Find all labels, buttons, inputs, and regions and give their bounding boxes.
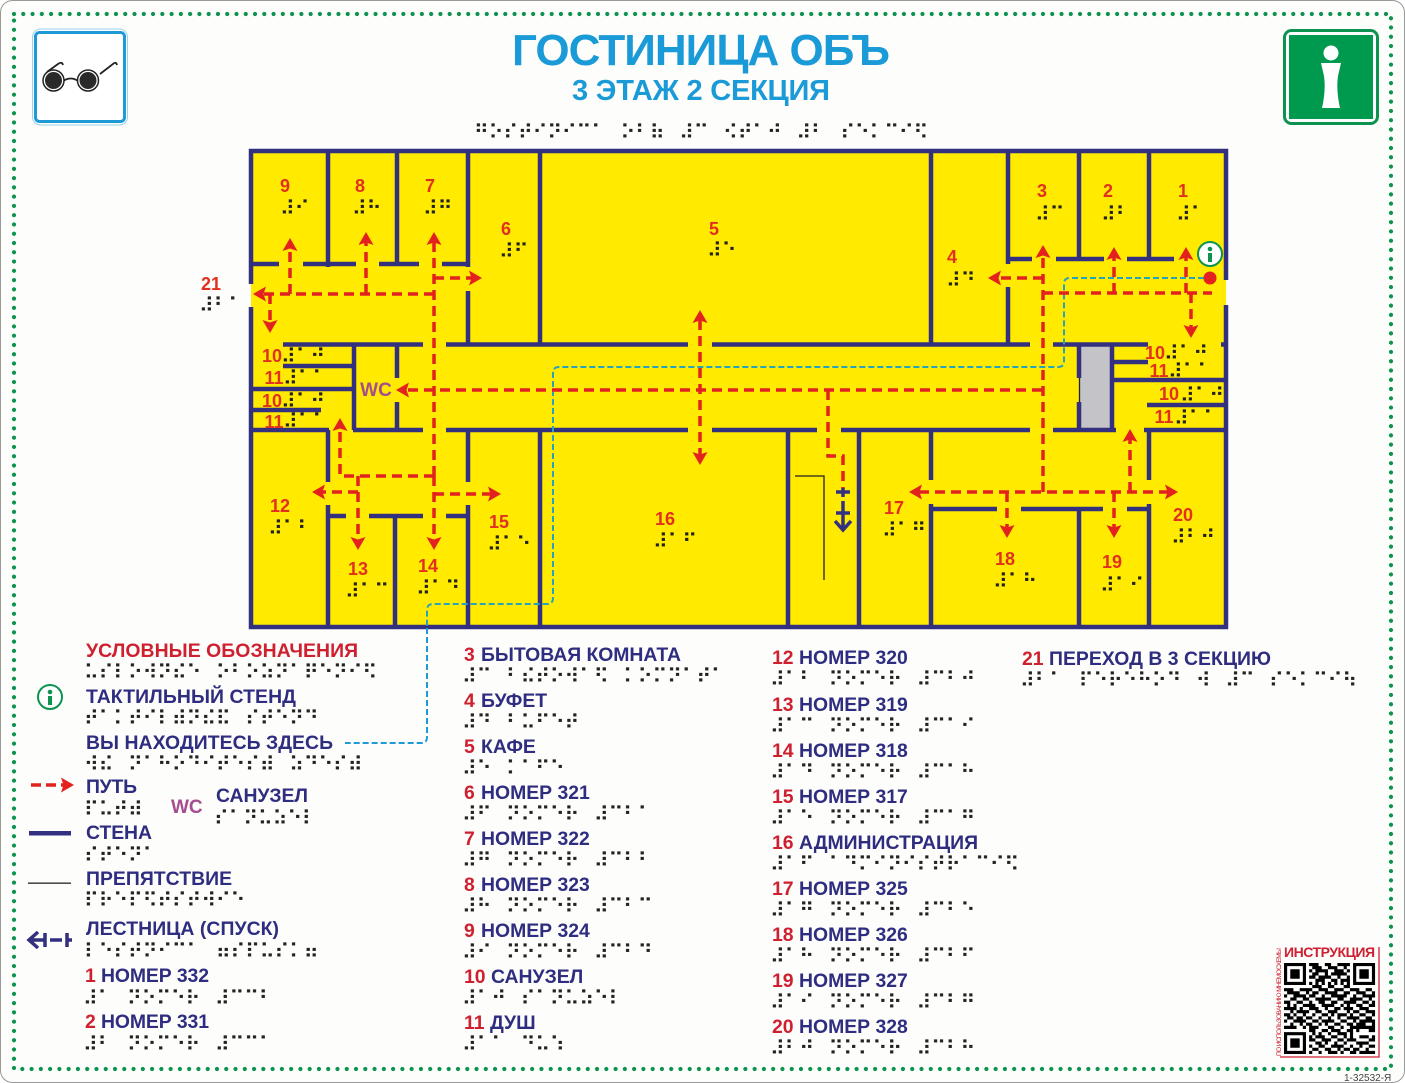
room 12: ⠼⠁⠃ <box>268 516 312 540</box>
legend: obstacle <box>84 868 245 912</box>
room 21: ⠼⠃⠁ <box>199 293 243 317</box>
room 13: ⠼⠁⠉ <box>345 579 389 603</box>
room 17: 17 <box>884 498 904 518</box>
right washroom 10: 10 <box>1145 343 1165 363</box>
legend item 20: ⠼⠃⠚ ⠝⠕⠍⠑⠗ ⠼⠉⠃⠓ <box>770 1036 975 1060</box>
floor plan <box>199 151 1226 630</box>
subtitle: 3 ЭТАЖ 2 СЕКЦИЯ <box>572 75 830 107</box>
left washroom 10 <box>262 344 325 368</box>
legend: you are here: ВЫ НАХОДИТЕСЬ ЗДЕСЬ <box>86 732 333 754</box>
legend item 8: ⠼⠓ ⠝⠕⠍⠑⠗ ⠼⠉⠃⠉ <box>462 894 652 918</box>
route arrows <box>263 242 1212 540</box>
room 3: ⠼⠉ <box>1035 202 1064 226</box>
legend: tactile stand icon <box>38 685 62 709</box>
legend item 1: ⠼⠁ ⠝⠕⠍⠑⠗ ⠼⠉⠉⠃ <box>83 986 273 1010</box>
room 18: 18 <box>995 549 1015 569</box>
left washroom 10 lower <box>262 389 325 413</box>
legend heading <box>84 640 377 684</box>
legend item 17 <box>770 878 975 922</box>
room 14: ⠼⠁⠙ <box>416 576 460 600</box>
room 19 <box>1100 552 1144 597</box>
legend: staircase: ЛЕСТНИЦА (СПУСК) <box>86 918 279 940</box>
right washroom 10 <box>1145 341 1208 365</box>
legend item 5 <box>462 736 565 780</box>
room 3 <box>1035 181 1064 226</box>
legend: WC symbol: WC <box>171 797 203 818</box>
room 13 <box>345 559 389 603</box>
room 19: ⠼⠁⠊ <box>1100 573 1144 597</box>
legend item 2 <box>83 1011 273 1056</box>
legend: route <box>84 776 143 821</box>
legend item 4: ⠼⠙ ⠃⠥⠋⠑⠞ <box>462 710 579 734</box>
legend item 4: БУФЕТ <box>481 690 547 712</box>
room 5: 5 <box>709 219 719 239</box>
QR instruction block <box>1276 944 1379 1057</box>
legend item 20 <box>770 1016 975 1060</box>
legend item 14: ⠼⠁⠙ ⠝⠕⠍⠑⠗ ⠼⠉⠁⠓ <box>770 760 975 784</box>
right shower 11 lower: 11 <box>1154 407 1174 427</box>
legend item 7: 7 <box>464 828 475 850</box>
legend item 16: АДМИНИСТРАЦИЯ <box>799 832 978 854</box>
legend: you are here: ⠺⠮ ⠝⠁⠓⠕⠙⠊⠞⠑⠎⠾ ⠵⠙⠑⠎⠾ <box>84 752 362 776</box>
legend item 3: БЫТОВАЯ КОМНАТА <box>481 644 681 666</box>
legend: tactile stand: ⠞⠁⠅⠞⠊⠇⠾⠝⠮⠯ ⠎⠞⠑⠝⠙ <box>84 706 318 730</box>
legend item 21: ПЕРЕХОД В 3 СЕКЦИЮ <box>1049 648 1271 670</box>
room 2 <box>1101 181 1130 226</box>
room 4 <box>946 247 975 292</box>
room 16: 16 <box>655 509 675 529</box>
room 12 <box>268 496 312 540</box>
room 20: 20 <box>1173 505 1193 525</box>
room 6: ⠼⠋ <box>499 239 528 263</box>
lift shaft <box>1080 345 1111 430</box>
room 5: ⠼⠑ <box>707 238 736 262</box>
icon: information sign <box>1284 30 1378 124</box>
legend item 1: НОМЕР 332 <box>101 965 209 987</box>
legend item 19: ⠼⠁⠊ ⠝⠕⠍⠑⠗ ⠼⠉⠃⠛ <box>770 990 975 1014</box>
room 4: ⠼⠙ <box>946 268 975 292</box>
legend item 7: ⠼⠛ ⠝⠕⠍⠑⠗ ⠼⠉⠃⠃ <box>462 848 652 872</box>
legend item 10 <box>462 966 623 1010</box>
room 7: ⠼⠛ <box>423 196 452 220</box>
right washroom 10 lower: ⠼⠁⠚ <box>1180 383 1224 407</box>
legend item 4: 4 <box>464 690 475 712</box>
legend item 16: ⠼⠁⠋ ⠁⠙⠍⠊⠝⠊⠎⠞⠗⠁⠉⠊⠫ <box>770 852 1019 876</box>
room 1: 1 <box>1178 181 1188 201</box>
QR code <box>1284 965 1375 1052</box>
legend item 2: 2 <box>85 1011 96 1033</box>
legend item 10: САНУЗЕЛ <box>491 966 583 988</box>
legend: staircase: ⠇⠑⠎⠞⠝⠊⠉⠁ ⠶⠎⠏⠥⠎⠅⠶ <box>84 939 318 963</box>
room 20 <box>1171 505 1215 549</box>
title in braille: ⠛⠕⠎⠞⠊⠝⠊⠉⠁ ⠕⠃⠷ ⠼⠉ ⠪⠞⠁⠚ ⠼⠃ ⠎⠑⠅⠉⠊⠫ <box>474 120 928 144</box>
icon: tactile stand marker <box>1198 242 1222 266</box>
legend item 13 <box>770 694 975 738</box>
room 19: 19 <box>1102 552 1122 572</box>
left washroom 10 lower: 10 <box>262 391 282 411</box>
room 9: 9 <box>280 176 290 196</box>
legend item 9 <box>462 920 652 964</box>
right shower 11 lower <box>1154 406 1218 430</box>
legend: obstacle: ⠏⠗⠑⠏⠫⠞⠎⠞⠺⠊⠑ <box>84 888 245 912</box>
legend: wall swatch <box>29 831 71 836</box>
room 21: 21 <box>201 274 221 294</box>
legend item 3: ⠼⠉ ⠃⠮⠞⠕⠺⠁⠫ ⠅⠕⠍⠝⠁⠞⠁ <box>462 664 726 688</box>
QR heading: ИНСТРУКЦИЯ <box>1284 944 1375 960</box>
room 17: ⠼⠁⠛ <box>882 518 926 542</box>
room 1: ⠼⠁ <box>1176 202 1205 226</box>
legend item 18: ⠼⠁⠓ ⠝⠕⠍⠑⠗ ⠼⠉⠃⠋ <box>770 944 975 968</box>
legend item 11 <box>462 1012 565 1056</box>
room 9 <box>280 176 309 220</box>
legend item 9: ⠼⠊ ⠝⠕⠍⠑⠗ ⠼⠉⠃⠙ <box>462 940 652 964</box>
room 7 <box>423 176 452 220</box>
legend item 4 <box>462 690 579 734</box>
legend: wall: СТЕНА <box>86 822 152 844</box>
legend item 15: 15 <box>772 786 794 808</box>
legend item 18: 18 <box>772 924 794 946</box>
legend heading: УСЛОВНЫЕ ОБОЗНАЧЕНИЯ <box>86 640 358 662</box>
room 6: 6 <box>501 219 511 239</box>
legend item 6: ⠼⠋ ⠝⠕⠍⠑⠗ ⠼⠉⠃⠁ <box>462 802 652 826</box>
legend item 13: НОМЕР 319 <box>799 694 908 716</box>
right shower 11: ⠼⠁⠁ <box>1168 359 1212 383</box>
room 16 <box>653 509 697 553</box>
obstacles <box>795 378 1080 580</box>
room 2: 2 <box>1103 181 1113 201</box>
legend item 19 <box>770 970 975 1014</box>
legend item 1: 1 <box>85 965 96 987</box>
legend: tactile stand <box>84 684 318 730</box>
legend: wall <box>84 822 157 867</box>
room 4: 4 <box>947 247 957 267</box>
right shower 11: 11 <box>1149 361 1169 381</box>
room 14 <box>416 556 460 600</box>
legend item 12: ⠼⠁⠃ ⠝⠕⠍⠑⠗ ⠼⠉⠃⠚ <box>770 667 975 691</box>
legend item 16 <box>770 832 1019 876</box>
legend item 3: 3 <box>464 644 475 666</box>
legend item 3 <box>462 644 726 688</box>
legend: route: ⠏⠥⠞⠾ <box>84 797 143 821</box>
legend item 14: 14 <box>772 740 794 762</box>
you are here dot <box>1204 272 1216 284</box>
right washroom 10: ⠼⠁⠚ <box>1164 341 1208 365</box>
legend item 20: 20 <box>772 1016 794 1038</box>
room 15: ⠼⠁⠑ <box>487 532 531 556</box>
room 16: ⠼⠁⠋ <box>653 529 697 553</box>
legend item 19: НОМЕР 327 <box>799 970 908 992</box>
legend item 14 <box>770 740 975 784</box>
legend item 12 <box>770 647 975 691</box>
legend item 2: НОМЕР 331 <box>101 1011 209 1033</box>
room 14: 14 <box>418 556 438 576</box>
WC label: WC <box>360 380 392 401</box>
legend item 13: 13 <box>772 694 794 716</box>
legend: you are here <box>84 732 362 776</box>
room 17 <box>882 498 926 542</box>
left washroom 10: 10 <box>262 346 282 366</box>
legend: tactile stand: ТАКТИЛЬНЫЙ СТЕНД <box>86 684 296 708</box>
legend item 21: ⠼⠃⠁ ⠏⠑⠗⠑⠓⠕⠙ ⠺ ⠼⠉ ⠎⠑⠅⠉⠊⠳ <box>1020 668 1357 692</box>
left shower 11 lower: ⠼⠁⠁ <box>283 409 327 433</box>
room 8: 8 <box>355 176 365 196</box>
walls <box>251 151 1226 627</box>
legend item 16: 16 <box>772 832 794 854</box>
legend item 5: ⠼⠑ ⠅⠁⠋⠑ <box>462 756 565 780</box>
legend item 20: НОМЕР 328 <box>799 1016 908 1038</box>
legend item 6: 6 <box>464 782 475 804</box>
legend: route: ПУТЬ <box>86 776 137 798</box>
legend connector line <box>345 628 427 743</box>
room 6 <box>499 219 528 263</box>
legend item 9: НОМЕР 324 <box>481 920 590 942</box>
legend item 7: НОМЕР 322 <box>481 828 590 850</box>
room 8 <box>352 176 381 220</box>
left shower 11: 11 <box>264 368 284 388</box>
legend item 13: ⠼⠁⠉ ⠝⠕⠍⠑⠗ ⠼⠉⠁⠊ <box>770 714 975 738</box>
legend item 8 <box>462 874 652 918</box>
route to current position <box>427 278 1204 630</box>
legend item 10: 10 <box>464 966 486 988</box>
room 8: ⠼⠓ <box>352 196 381 220</box>
legend heading: ⠥⠎⠇⠕⠺⠝⠮⠑ ⠕⠃⠕⠵⠝⠁⠟⠑⠝⠊⠫ <box>84 660 377 684</box>
room 2: ⠼⠃ <box>1101 202 1130 226</box>
legend item 10: ⠼⠁⠚ ⠎⠁⠝⠥⠵⠑⠇ <box>462 986 623 1010</box>
QR frame <box>1280 947 1379 1057</box>
legend item 19: 19 <box>772 970 794 992</box>
room 21 <box>199 274 243 317</box>
legend: obstacle: ПРЕПЯТСТВИЕ <box>86 868 232 890</box>
left washroom 10 lower: ⠼⠁⠚ <box>281 389 325 413</box>
legend item 11: ДУШ <box>490 1012 536 1034</box>
legend: obstacle swatch <box>28 882 71 884</box>
legend: sanitary unit <box>214 785 317 830</box>
legend item 11: 11 <box>464 1012 485 1034</box>
room 18 <box>993 549 1037 593</box>
room 12: 12 <box>270 496 290 516</box>
legend item 15 <box>770 786 975 830</box>
room 15: 15 <box>489 512 509 532</box>
room 13: 13 <box>348 559 368 579</box>
icon: dark glasses sign <box>32 29 128 125</box>
legend item 5: КАФЕ <box>481 736 536 758</box>
legend item 8: НОМЕР 323 <box>481 874 590 896</box>
left washroom 10: ⠼⠁⠚ <box>281 344 325 368</box>
legend: sanitary unit: ⠎⠁⠝⠥⠵⠑⠇ <box>214 806 317 830</box>
legend item 17: ⠼⠁⠛ ⠝⠕⠍⠑⠗ ⠼⠉⠃⠑ <box>770 898 975 922</box>
legend item 17: 17 <box>772 878 794 900</box>
legend item 21: 21 <box>1022 648 1044 670</box>
legend: sanitary unit: САНУЗЕЛ <box>216 785 308 807</box>
legend item 18 <box>770 924 975 968</box>
legend item 1 <box>83 965 273 1010</box>
room 15 <box>487 512 531 556</box>
room 3: 3 <box>1037 181 1047 201</box>
legend item 8: 8 <box>464 874 475 896</box>
legend item 18: НОМЕР 326 <box>799 924 908 946</box>
right shower 11 lower: ⠼⠁⠁ <box>1174 406 1218 430</box>
plan floor area <box>251 151 1226 627</box>
title: ГОСТИНИЦА ОБЪ <box>512 26 890 75</box>
left shower 11 lower: 11 <box>264 412 284 432</box>
legend item 6: НОМЕР 321 <box>481 782 590 804</box>
staircase symbol <box>835 488 851 530</box>
legend: wall: ⠎⠞⠑⠝⠁ <box>84 843 157 867</box>
legend item 15: НОМЕР 317 <box>799 786 908 808</box>
legend item 15: ⠼⠁⠑ ⠝⠕⠍⠑⠗ ⠼⠉⠁⠛ <box>770 806 975 830</box>
room 9: ⠼⠊ <box>280 196 309 220</box>
legend item 2: ⠼⠃ ⠝⠕⠍⠑⠗ ⠼⠉⠉⠁ <box>83 1032 273 1056</box>
legend item 7 <box>462 828 652 872</box>
legend: staircase icon <box>29 932 72 948</box>
right washroom 10 lower: 10 <box>1159 384 1179 404</box>
room 5 <box>707 219 736 262</box>
legend item 11: ⠼⠁⠁ ⠙⠥⠱ <box>462 1032 565 1056</box>
legend item 17: НОМЕР 325 <box>799 878 908 900</box>
legend item 12: НОМЕР 320 <box>799 647 908 669</box>
legend item 9: 9 <box>464 920 475 942</box>
left shower 11: ⠼⠁⠁ <box>283 366 327 390</box>
room 20: ⠼⠃⠚ <box>1171 525 1215 549</box>
legend item 6 <box>462 782 652 826</box>
room 18: ⠼⠁⠓ <box>993 569 1037 593</box>
legend: staircase <box>84 918 318 963</box>
room 1 <box>1176 181 1205 226</box>
legend item 12: 12 <box>772 647 794 669</box>
right washroom 10 lower <box>1159 383 1224 407</box>
QR side caption: ПО ИСПОЛЬЗОВАНИЮ МНЕМОСХЕМЫ <box>1276 948 1283 1056</box>
legend item 14: НОМЕР 318 <box>799 740 908 762</box>
room 7: 7 <box>425 176 435 196</box>
legend item 21 <box>1020 648 1357 692</box>
legend: route arrow <box>31 783 64 787</box>
legend item 5: 5 <box>464 736 475 758</box>
